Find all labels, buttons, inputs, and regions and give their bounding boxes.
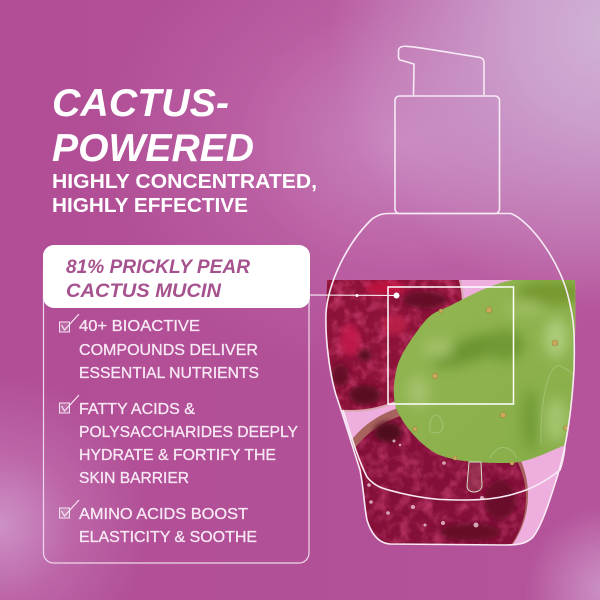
benefit 2 text: HYDRATE & FORTIFY THE [79,447,276,464]
subtitle: HIGHLY EFFECTIVE [52,195,248,217]
title: POWERED [52,127,254,170]
gel ridges [430,366,576,458]
benefit 2 text: SKIN BARRIER [79,470,189,487]
white callout [43,245,310,308]
bottle body [326,214,574,545]
benefit 1 text [79,318,259,382]
benefit 2 text [79,401,298,487]
infographic canvas [42,46,576,564]
title [52,82,254,170]
upper jam dish [326,280,464,412]
thorns [413,307,568,465]
white callout: CACTUS MUCIN [66,281,222,302]
benefit 1 text: ESSENTIAL NUTRIENTS [79,365,259,382]
benefit 2 text: FATTY ACIDS & [79,401,195,418]
icon: check 3 [60,500,79,518]
benefit 1 text: 40+ BIOACTIVE [79,318,200,335]
title: CACTUS- [52,82,229,125]
panel: benefits [43,245,310,563]
product photo clipped to bottle [326,280,576,544]
benefit 3 text: AMINO ACIDS BOOST [79,506,248,523]
benefit 1 text: COMPOUNDS DELIVER [79,342,258,359]
benefit 2 text: POLYSACCHARIDES DEEPLY [79,424,298,441]
heading [52,82,317,217]
benefit 3 text [79,506,257,546]
benefit 3 text: ELASTICITY & SOOTHE [79,529,257,546]
callout connector and zoom box [310,287,514,404]
cactus pad [394,280,576,466]
liquid level curve [343,410,565,500]
icon: check 1 [60,314,79,332]
pink backdrop [320,280,580,550]
subtitle [52,171,317,217]
subtitle: HIGHLY CONCENTRATED, [52,171,317,193]
gel drip [467,462,482,492]
white callout: 81% PRICKLY PEAR [66,257,250,278]
collar [395,96,500,214]
lower jam dish [352,408,528,544]
bottle outline [326,46,574,545]
icon: check 2 [60,395,79,413]
pump head [398,46,484,95]
panel outline [44,260,309,563]
